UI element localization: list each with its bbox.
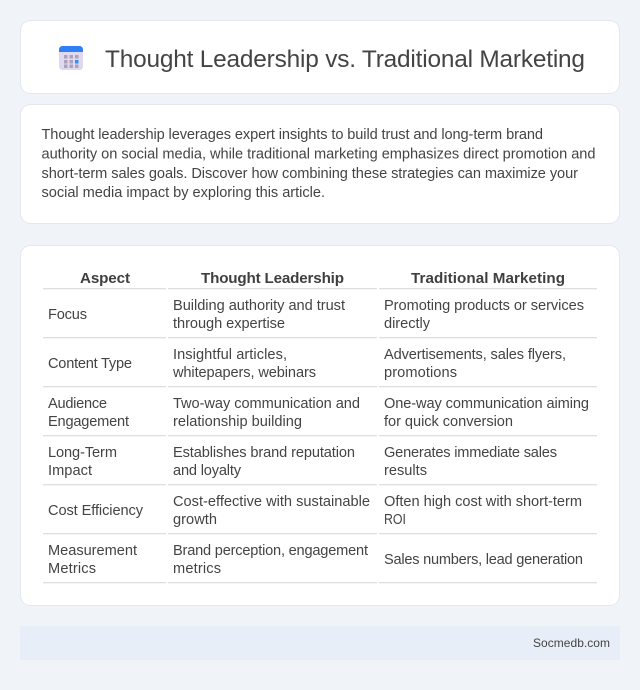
- row: content type: [48, 347, 566, 381]
- row: cost efficiency: Cost Efficiency: [48, 503, 144, 519]
- row: focus: directly: [384, 316, 431, 332]
- panel: title card: [20, 20, 620, 94]
- panel: introduction: [20, 104, 620, 224]
- row: measurement metrics: Metrics: [48, 561, 96, 577]
- row: cost efficiency: ROI: [384, 512, 406, 528]
- row: focus: [48, 298, 584, 332]
- row: content type: promotions: [384, 365, 457, 381]
- row: audience engagement: Engagement: [48, 414, 129, 430]
- row: audience engagement: [48, 396, 589, 430]
- title: Thought Leadership vs. Traditional Marketing: [105, 46, 585, 73]
- row: long-term impact: Long-Term: [48, 445, 117, 461]
- row: audience engagement: One-way communication aiming: [384, 396, 589, 412]
- row: long-term impact: [48, 445, 557, 479]
- intro paragraph: authority on social media, while traditional marketing emphasizes direct promotion and: [42, 146, 596, 162]
- table header: Aspect: [80, 270, 130, 287]
- footer: [20, 626, 620, 660]
- table header: Thought Leadership: [201, 270, 344, 287]
- footer: Socmedb.com: [533, 636, 610, 650]
- row: cost efficiency: Often high cost with short-term: [384, 494, 582, 510]
- row: cost efficiency: Cost-effective with sustainable: [173, 494, 370, 510]
- table header: [80, 270, 565, 287]
- row: measurement metrics: Measurement: [48, 543, 137, 559]
- row: long-term impact: and loyalty: [173, 463, 242, 479]
- row: focus: through expertise: [173, 316, 285, 332]
- row: cost efficiency: [48, 494, 582, 528]
- row: audience engagement: for quick conversion: [384, 414, 513, 430]
- intro paragraph: Thought leadership leverages expert insights to build trust and long-term brand: [42, 127, 543, 143]
- row: long-term impact: Generates immediate sales: [384, 445, 557, 461]
- row: long-term impact: results: [384, 463, 427, 479]
- panel: comparison table: [20, 246, 620, 606]
- icon: calendar: [59, 46, 83, 70]
- row: long-term impact: Establishes brand reputation: [173, 445, 355, 461]
- row: focus: Promoting products or services: [384, 298, 584, 314]
- row: measurement metrics: [48, 543, 583, 577]
- row: content type: Insightful articles,: [173, 347, 287, 363]
- row: audience engagement: relationship building: [173, 414, 302, 430]
- row: measurement metrics: metrics: [173, 561, 221, 577]
- row: long-term impact: Impact: [48, 463, 92, 479]
- row: content type: whitepapers, webinars: [172, 365, 316, 381]
- row: cost efficiency: growth: [173, 512, 217, 528]
- row: audience engagement: Two-way communication and: [173, 396, 360, 412]
- intro paragraph: short-term sales goals. Discover how combining these strategies can maximize your: [42, 166, 578, 182]
- row: audience engagement: Audience: [48, 396, 107, 412]
- table header: Traditional Marketing: [411, 270, 565, 287]
- row: focus: Focus: [48, 307, 87, 323]
- row: measurement metrics: Brand perception, engagement: [173, 543, 368, 559]
- intro paragraph: social media impact by exploring this article.: [42, 185, 325, 201]
- row: focus: Building authority and trust: [173, 298, 345, 314]
- intro paragraph: [42, 127, 596, 201]
- row: content type: Advertisements, sales flyers,: [384, 347, 566, 363]
- row: content type: Content Type: [48, 356, 132, 372]
- row: measurement metrics: Sales numbers, lead generation: [384, 552, 583, 568]
